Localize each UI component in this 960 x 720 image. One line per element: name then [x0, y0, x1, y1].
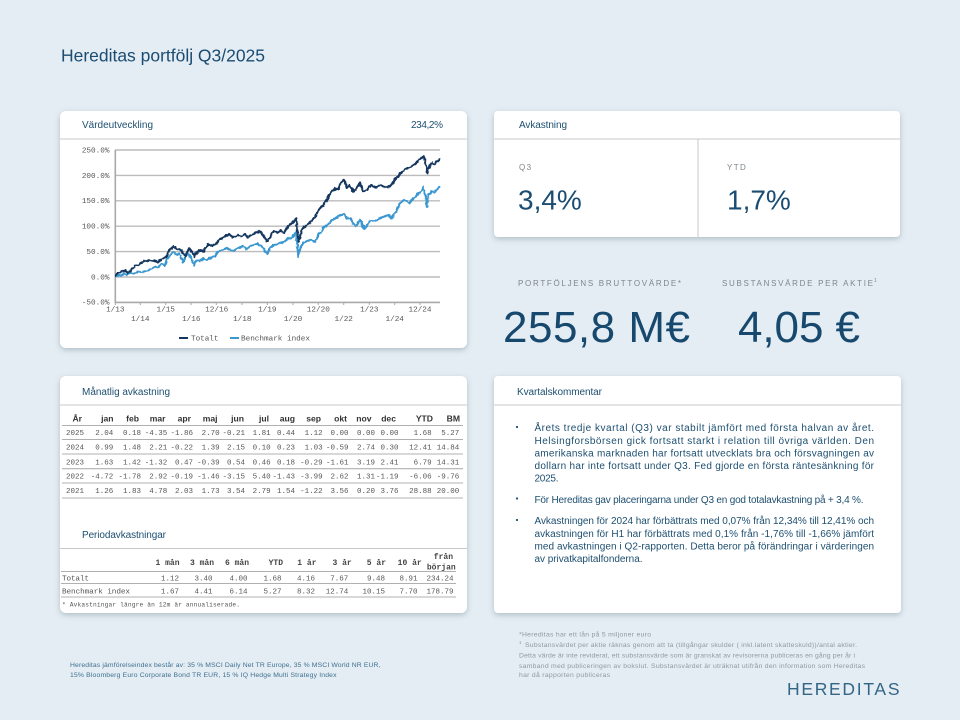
monthly returns table: 5.40 — [253, 474, 271, 482]
monthly returns table: jan — [100, 414, 114, 424]
legend — [179, 335, 310, 343]
bullet 1: Årets tredje kvartal (Q3) var stabilt jämfört med första halvan av året. — [534, 421, 874, 434]
monthly returns table: 1.73 — [202, 488, 220, 496]
monthly returns table: 2024 — [66, 444, 84, 452]
monthly returns table: aug — [280, 414, 295, 424]
kpi: portföljens bruttovärde — [503, 279, 690, 352]
x axis labels: 1/18 — [233, 316, 252, 324]
legend: Benchmark index — [241, 335, 310, 343]
period returns table: 1 mån — [155, 559, 180, 568]
monthly returns table: 3.56 — [330, 488, 349, 496]
monthly returns table: 2.21 — [149, 444, 168, 452]
monthly returns table: 1.42 — [123, 459, 141, 467]
monthly returns table: 6.79 — [414, 459, 432, 467]
period returns table: 4.16 — [297, 576, 315, 584]
monthly returns table: 2023 — [66, 459, 84, 467]
heading: avkastning: Avkastning — [519, 120, 567, 131]
monthly returns table: -3.15 — [222, 474, 245, 482]
monthly returns table: -1.86 — [170, 430, 193, 438]
kpi: portföljens bruttovärde: PORTFÖLJENS BRUTTOVÄRDE* — [518, 279, 681, 288]
monthly returns table: 1.83 — [123, 488, 141, 496]
x axis labels: 1/13 — [106, 306, 125, 314]
bullet 1: Helsingforsbörsen gick fortsatt starkt i relation till övriga världen. Den — [534, 436, 874, 447]
x axis labels: 12/16 — [205, 306, 229, 314]
monthly returns table: 2.92 — [149, 474, 167, 482]
panel: kvartalskommentar — [494, 376, 901, 613]
monthly returns table: 0.54 — [227, 459, 245, 467]
x axis labels: 1/14 — [131, 316, 150, 324]
logo: Hereditas: HEREDITAS — [787, 679, 900, 699]
period returns table: 1.67 — [161, 589, 179, 597]
monthly returns table: 3.19 — [357, 459, 375, 467]
monthly returns table: 0.00 — [380, 430, 399, 438]
monthly returns table: 12.41 — [409, 444, 432, 452]
kpi: Q3: Q3 — [519, 163, 532, 172]
kpi: YTD: 1,7% — [727, 184, 791, 216]
monthly returns table: 4.78 — [149, 488, 167, 496]
monthly returns table: 0.47 — [175, 459, 193, 467]
monthly returns table: 2025 — [66, 430, 84, 438]
monthly returns table: apr — [178, 414, 192, 424]
y axis labels: 200.0% — [82, 173, 110, 181]
footnotes: 1 — [519, 640, 522, 645]
monthly returns table: sep — [306, 414, 321, 424]
benchmark composition note — [70, 661, 381, 679]
monthly returns table: 2.74 — [357, 444, 375, 452]
total return value: 234,2% — [411, 120, 443, 131]
monthly returns table: År — [72, 414, 83, 424]
monthly returns table: 0.18 — [123, 430, 141, 438]
kpi: portföljens bruttovärde: 255,8 M€ — [503, 303, 690, 352]
x axis labels — [106, 306, 432, 324]
panel: avkastning — [494, 111, 900, 237]
period returns table: 1 år — [297, 559, 317, 568]
kpi: substansvärde per aktie: SUBSTANSVÄRDE PER AKTIE — [722, 279, 873, 288]
bullet 3: med avkastningen i Q2-rapporten. Detta beror på förändringar i värderingen — [534, 540, 874, 552]
monthly returns table: YTD — [416, 414, 433, 424]
monthly returns table: 2.70 — [202, 430, 220, 438]
monthly returns table: 2.79 — [253, 488, 271, 496]
period returns table: från — [434, 553, 453, 562]
series: benchmark index — [115, 187, 440, 277]
monthly returns table: jun — [230, 414, 244, 424]
monthly returns table: nov — [356, 414, 372, 424]
monthly returns table: 3.76 — [380, 488, 399, 496]
heading: kvartalskommentar: Kvartalskommentar — [517, 387, 603, 398]
monthly returns table: 14.31 — [437, 459, 460, 467]
footnotes: Detta värde är inte reviderat, ett substansvärde som är granskat av revisorerna publiceras en gång per år i — [519, 652, 855, 660]
heading: månatlig avkastning: Månatlig avkastning — [82, 386, 170, 398]
kpi: substansvärde per aktie: 1 — [874, 278, 877, 284]
monthly returns table: 1.48 — [123, 444, 141, 452]
monthly returns table: 0.18 — [277, 459, 295, 467]
footnotes: har då rapporten publiceras — [519, 671, 611, 679]
monthly returns table: 2022 — [66, 474, 84, 482]
monthly returns table: -0.19 — [170, 474, 193, 482]
y axis labels: 50.0% — [86, 249, 110, 257]
period returns table: 10.15 — [362, 589, 385, 597]
monthly returns table: -1.61 — [326, 459, 349, 467]
x axis labels: 1/23 — [360, 306, 379, 314]
monthly returns table: 2.62 — [330, 474, 348, 482]
kpi: YTD: YTD — [727, 163, 747, 172]
period returns table: Benchmark index — [62, 589, 130, 597]
x axis labels: 1/20 — [284, 316, 303, 324]
monthly returns table: -0.39 — [197, 459, 220, 467]
monthly returns table: -1.19 — [376, 474, 398, 482]
period returns table: 6 mån — [225, 559, 249, 568]
footnotes: *Hereditas har ett lån på 5 miljoner euro — [519, 630, 651, 638]
legend: Totalt — [191, 335, 218, 343]
monthly returns table: 0.00 — [330, 430, 349, 438]
y axis labels — [82, 148, 110, 308]
footnotes — [519, 630, 866, 679]
period returns table: YTD — [269, 559, 283, 568]
line chart — [82, 148, 440, 324]
title: Hereditas portfölj Q3/2025 — [61, 46, 265, 66]
period returns table: 4.41 — [194, 589, 213, 597]
monthly returns table: -0.59 — [326, 444, 348, 452]
monthly returns table — [62, 414, 463, 498]
period returns table: 9.48 — [367, 576, 385, 584]
period returns table: 12.74 — [326, 589, 349, 597]
monthly returns table: 14.84 — [437, 444, 460, 452]
period returns table: början — [427, 564, 456, 572]
monthly returns table: 2.15 — [227, 444, 245, 452]
benchmark composition note: Hereditas jämförelseindex består av: 35 % MSCI Daily Net TR Europe, 35 % MSCI World NR EUR, — [70, 661, 381, 669]
period returns table: 234.24 — [426, 576, 454, 584]
x axis labels: 12/20 — [307, 306, 330, 314]
bullet 3: Avkastningen för 2024 har förbättrats med 0,07% från 12,34% till 12,41% och — [534, 515, 874, 527]
monthly returns table: 2.04 — [95, 430, 114, 438]
kpi: Q3 — [518, 163, 582, 216]
monthly returns table: BM — [447, 414, 460, 424]
monthly returns table: 0.10 — [253, 444, 271, 452]
monthly returns table: 1.81 — [253, 430, 271, 438]
kpi: substansvärde per aktie: 4,05 € — [738, 303, 860, 352]
monthly returns table: 1.54 — [277, 488, 295, 496]
monthly returns table: 0.99 — [95, 444, 113, 452]
panel: månatlig avkastning och periodavkastningar — [60, 376, 467, 613]
period returns table: 5.27 — [263, 589, 282, 597]
bullet 1: amerikanska marknaden har fortsatt utvecklats bra och försvagningen av — [534, 448, 874, 460]
monthly returns table: 1.63 — [95, 459, 114, 467]
bullet 1: dollarn har inte fortsatt under Q3. Fed gjorde en första räntesänkning för — [534, 461, 875, 472]
monthly returns table: 20.00 — [437, 488, 460, 496]
monthly returns table: -1.46 — [197, 474, 220, 482]
monthly returns table: jul — [258, 414, 269, 424]
series: totalt — [115, 157, 440, 277]
monthly returns table: -0.22 — [170, 444, 193, 452]
monthly returns table: 1.68 — [414, 430, 432, 438]
monthly returns table: -0.29 — [300, 459, 323, 467]
kpi: substansvärde per aktie — [722, 278, 877, 352]
monthly returns table: -4.35 — [145, 430, 168, 438]
table footnote: * Avkastningar längre än 12m är annualiserade. — [62, 601, 240, 608]
x axis labels: 1/22 — [334, 316, 353, 324]
monthly returns table: 1.03 — [305, 444, 323, 452]
monthly returns table: -1.43 — [272, 474, 295, 482]
monthly returns table: dec — [381, 414, 396, 424]
bullet 3 — [516, 515, 874, 565]
monthly returns table: 0.46 — [253, 459, 271, 467]
bullet 3: av privatkapitalfonderna. — [534, 554, 642, 565]
monthly returns table: -1.32 — [145, 459, 167, 467]
heading: periodavkastningar: Periodavkastningar — [82, 530, 167, 541]
period returns table: 6.14 — [229, 589, 248, 597]
monthly returns table: 1.26 — [95, 488, 114, 496]
heading: värdeutveckling: Värdeutveckling — [82, 120, 153, 131]
period returns table: 3.40 — [194, 576, 213, 584]
period returns table: 1.68 — [263, 576, 282, 584]
period returns table: 8.91 — [399, 576, 418, 584]
y axis labels: -50.0% — [82, 300, 110, 308]
period returns table: 8.32 — [297, 589, 315, 597]
panel: värdeutveckling — [60, 111, 467, 348]
monthly returns table: 28.88 — [409, 488, 432, 496]
monthly returns table: 0.30 — [380, 444, 399, 452]
monthly returns table: 1.12 — [305, 430, 323, 438]
bullet 2: För Hereditas gav placeringarna under Q3 en god totalavkastning på + 3,4 %. — [534, 494, 864, 506]
monthly returns table: maj — [203, 414, 218, 424]
footnotes: Substansvärdet per aktie räknas genom att ta (tillgångar skulder ( inkl.latent skatteskuld))/antal aktier. — [525, 641, 857, 649]
monthly returns table: 1.31 — [357, 474, 375, 482]
kpi: YTD — [727, 163, 791, 216]
period returns table: 1.12 — [161, 576, 179, 584]
monthly returns table: -3.99 — [300, 474, 323, 482]
x axis labels: 1/19 — [258, 306, 277, 314]
period returns table: 178.79 — [426, 589, 454, 597]
period returns table: 5 år — [367, 559, 386, 568]
period returns table: 4.00 — [229, 576, 248, 584]
period returns table — [61, 553, 456, 608]
monthly returns table: mar — [150, 414, 166, 424]
monthly returns table: -9.76 — [437, 474, 460, 482]
monthly returns table: 3.54 — [227, 488, 245, 496]
kpi: Q3: 3,4% — [518, 184, 582, 216]
monthly returns table: 0.20 — [357, 488, 375, 496]
y axis labels: 150.0% — [82, 198, 110, 206]
period returns table: Totalt — [62, 576, 89, 584]
footnotes: samband med publiceringen av bokslut. Substansvärdet är uträknat utifrån den information som Hereditas — [519, 662, 866, 670]
period returns table: 3 mån — [190, 559, 214, 568]
monthly returns table: -1.22 — [300, 488, 323, 496]
monthly returns table: 1.39 — [202, 444, 220, 452]
bullet 1 — [516, 421, 875, 484]
x axis labels: 1/24 — [385, 316, 404, 324]
y axis labels: 250.0% — [82, 148, 110, 156]
monthly returns table: -1.78 — [118, 474, 141, 482]
monthly returns table: 5.27 — [441, 430, 459, 438]
monthly returns table: 0.23 — [277, 444, 295, 452]
y axis labels: 100.0% — [82, 224, 110, 232]
x axis labels: 1/15 — [156, 306, 175, 314]
y axis labels: 0.0% — [91, 274, 110, 282]
monthly returns table: -4.72 — [91, 474, 113, 482]
bullet 1: 2025. — [534, 474, 558, 484]
monthly returns table: 2021 — [66, 488, 84, 496]
x axis labels: 12/24 — [408, 306, 432, 314]
monthly returns table: -6.06 — [409, 474, 432, 482]
period returns table: 10 år — [398, 559, 422, 568]
period returns table: 3 år — [332, 559, 352, 568]
period returns table: 7.70 — [399, 589, 418, 597]
monthly returns table: -0.21 — [222, 430, 245, 438]
monthly returns table: 2.03 — [175, 488, 193, 496]
monthly returns table: okt — [334, 414, 347, 424]
monthly returns table: 2.41 — [380, 459, 399, 467]
monthly returns table: feb — [126, 414, 139, 424]
monthly returns table: 0.44 — [277, 430, 295, 438]
period returns table: 7.67 — [330, 576, 348, 584]
bullet 3: avkastningen för H1 har förbättrats med 0,1% från -1,76% till -1,66% jämfört — [534, 528, 874, 540]
benchmark composition note: 15% Bloomberg Euro Corporate Bond TR EUR, 15 % IQ Hedge Multi Strategy Index — [70, 672, 337, 679]
comment text — [516, 421, 875, 565]
x axis labels: 1/16 — [182, 316, 201, 324]
monthly returns table: 0.00 — [357, 430, 375, 438]
